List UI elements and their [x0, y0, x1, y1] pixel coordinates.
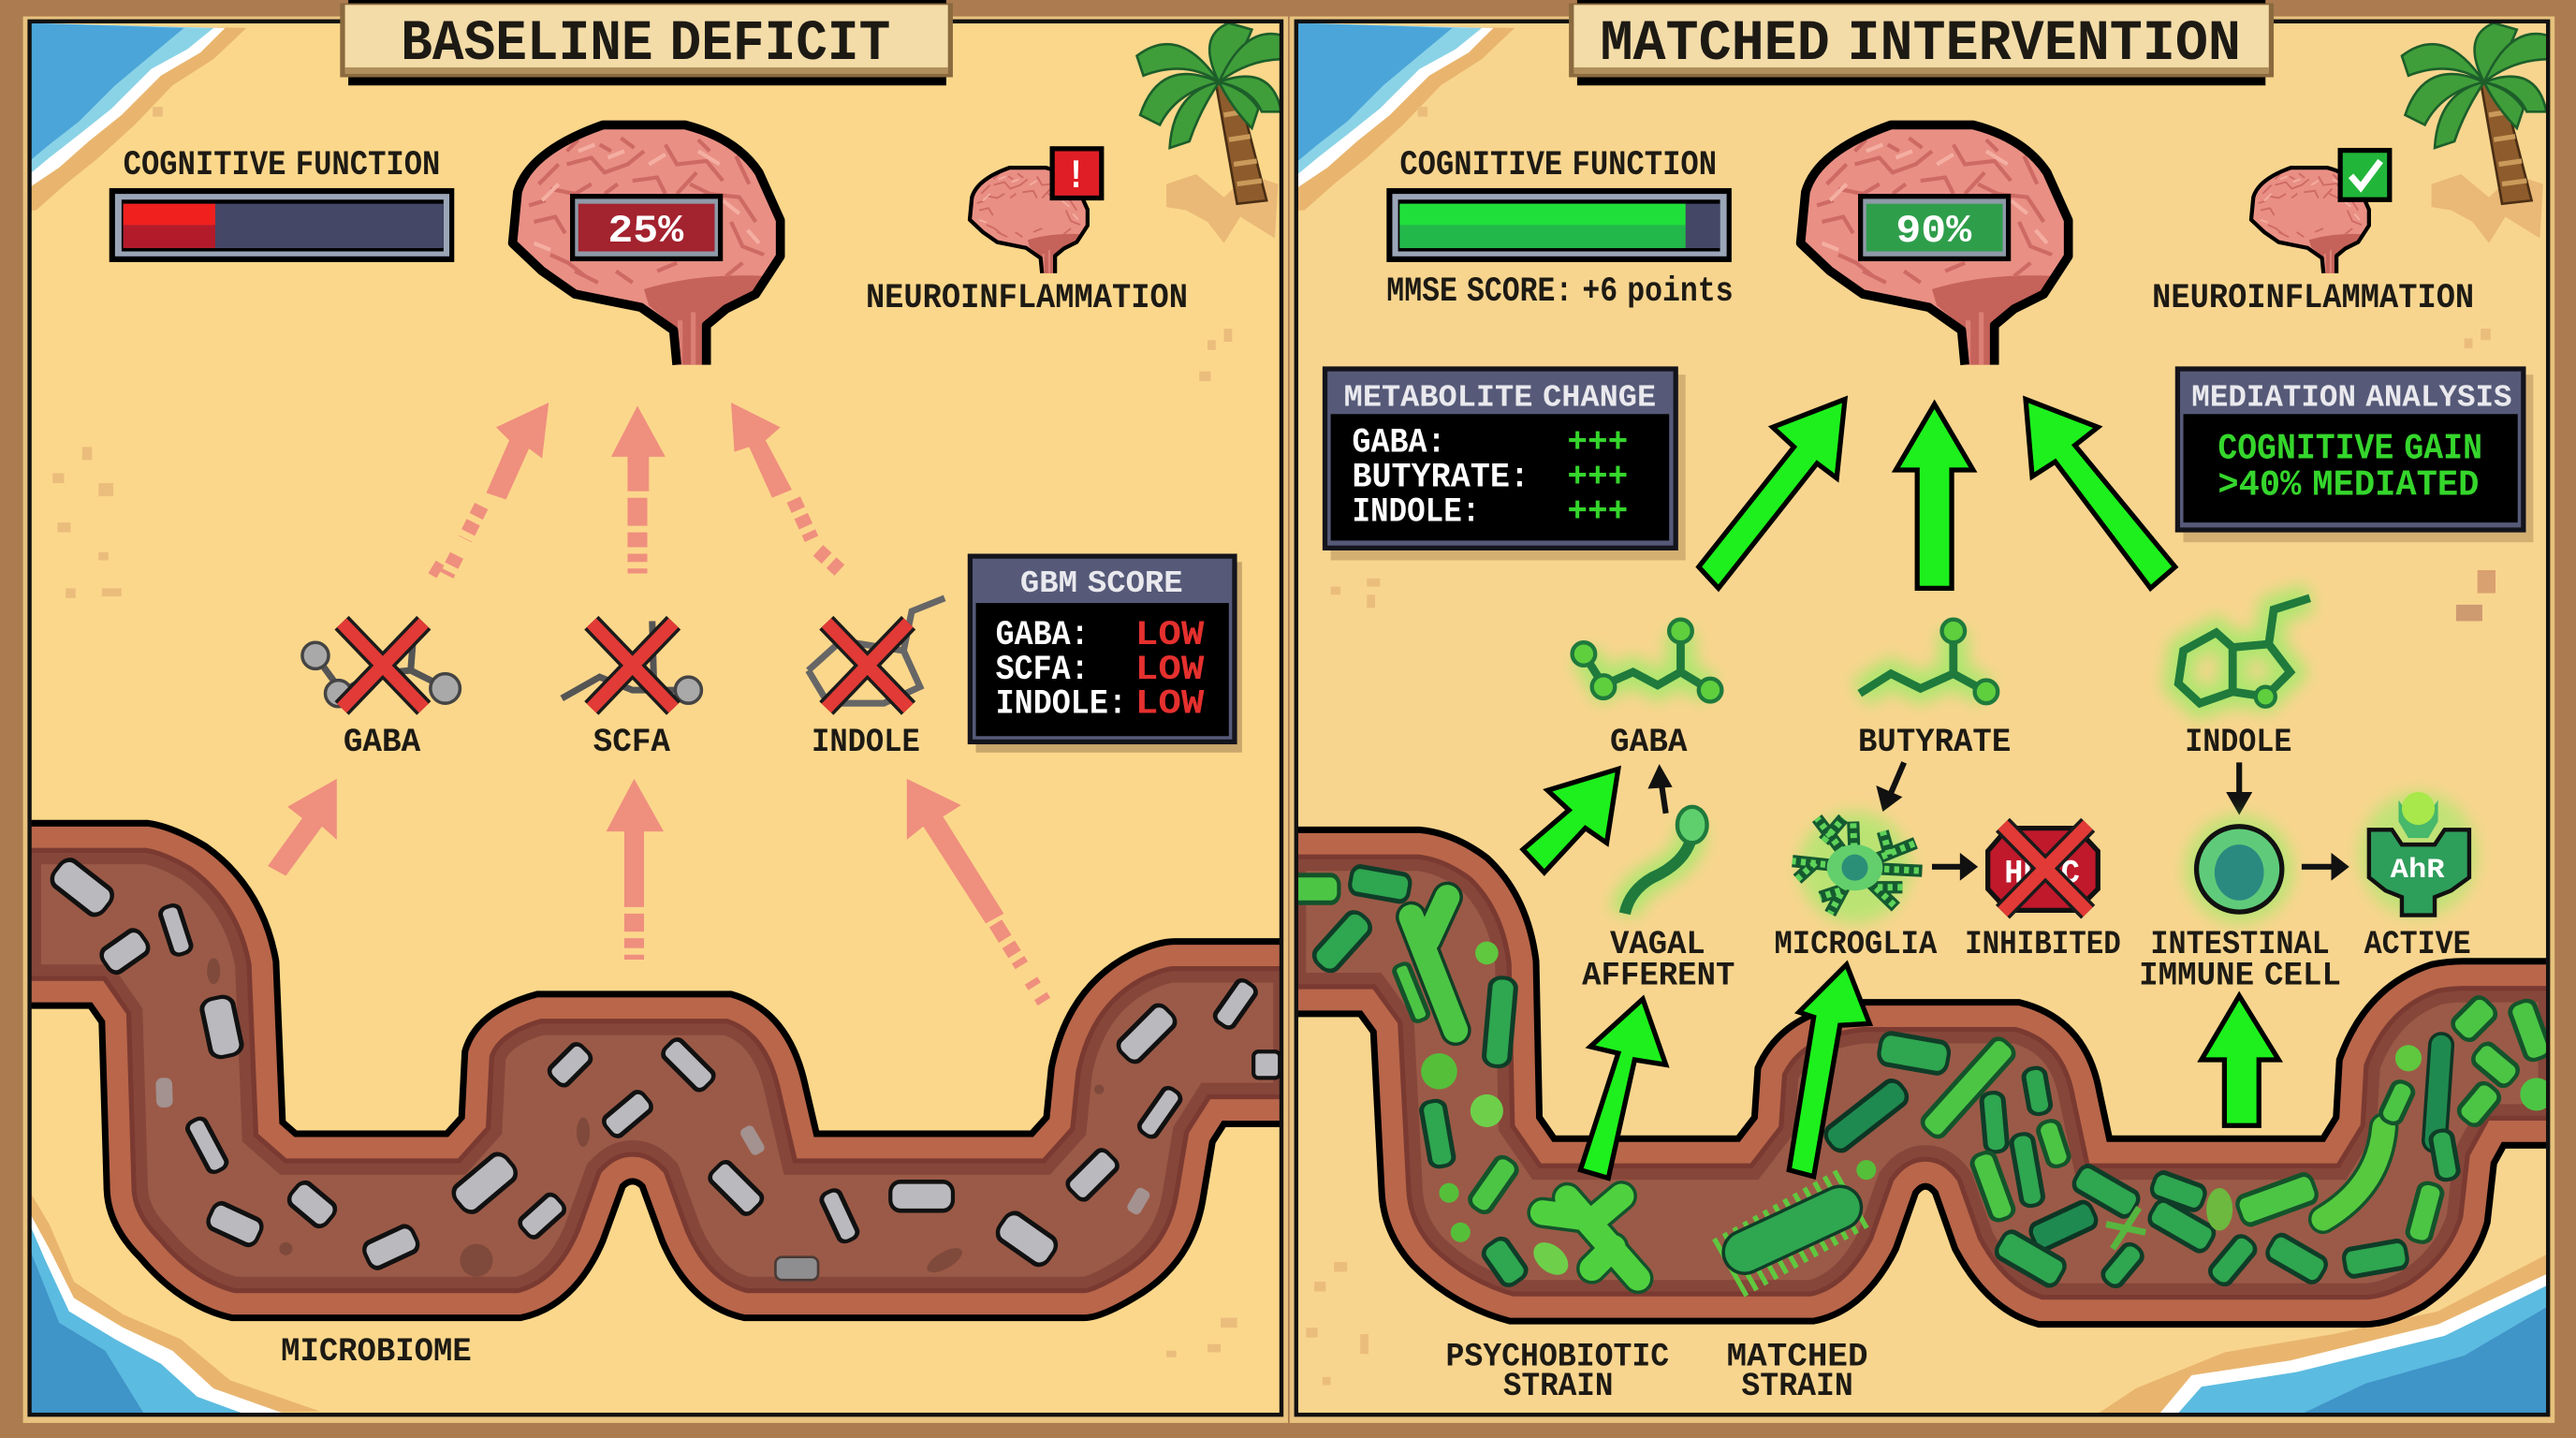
beach water bottom-left — [30, 1191, 320, 1415]
panel: mediation analysis: MEDIATION ANALYSIS — [2191, 381, 2512, 417]
beach water top-left — [1298, 23, 1515, 211]
HDAC inhibited — [1988, 825, 2098, 912]
labels: cell targets: ACTIVE — [2364, 926, 2471, 963]
label: psychobiotic strain — [1445, 1338, 1669, 1405]
neuroinflammation small brain with check — [2251, 148, 2392, 273]
AhR receptor active: AhR — [2391, 854, 2445, 886]
neuroinflammation small brain with alert — [970, 146, 1104, 273]
labels: metabolites: INDOLE — [2185, 724, 2291, 761]
arrows: fading microbiome to metabolites — [268, 779, 1046, 1005]
labels: metabolites: BUTYRATE — [1858, 724, 2011, 761]
panel: metabolite change: GABA: — [1352, 424, 1445, 463]
panel border — [30, 22, 1281, 1415]
panel: mediation analysis — [2175, 366, 2533, 542]
labels: deficient metabolites — [344, 724, 920, 761]
label: neuroinflammation: NEUROINFLAMMATION — [2152, 279, 2474, 318]
molecule: indole glowing — [2178, 598, 2310, 707]
microglia cell — [1793, 812, 1922, 923]
labels: cell targets — [1775, 926, 2471, 994]
label: neuroinflammation: NEUROINFLAMMATION — [866, 279, 1188, 318]
panel: GBM score: LOW — [1135, 685, 1205, 725]
label: psychobiotic strain: STRAIN — [1503, 1368, 1614, 1405]
vagal afferent nerve — [1625, 807, 1707, 914]
panel: GBM score: INDOLE: — [996, 685, 1127, 725]
molecule: butyrate glowing — [1860, 620, 1998, 703]
panel: matched intervention — [1265, 0, 2576, 1423]
arrows: fading metabolite to brain — [432, 403, 840, 579]
label: cognitive function: COGNITIVE FUNCTION — [1399, 146, 1717, 185]
palm tree — [2402, 23, 2550, 243]
brain score 25%: 25% — [607, 209, 684, 254]
labels: deficient metabolites: INDOLE — [812, 724, 920, 761]
label: psychobiotic strain: PSYCHOBIOTIC — [1445, 1338, 1669, 1375]
green bacteria — [1290, 865, 2553, 1290]
panel: metabolite change: +++ — [1567, 492, 1628, 532]
title plaque: baseline deficit — [340, 0, 953, 85]
panel: baseline deficit — [0, 0, 1314, 1423]
panel: GBM score: GABA: — [996, 616, 1090, 655]
palm tree — [1137, 23, 1284, 243]
labels: cell targets: IMMUNE CELL — [2139, 957, 2341, 994]
panel: metabolite change: +++ — [1567, 459, 1628, 498]
brain score 90%: 90% — [1895, 209, 1972, 254]
panel: metabolite change — [1323, 366, 1686, 560]
labels: deficient metabolites: GABA — [344, 724, 421, 761]
label: cognitive function: COGNITIVE FUNCTION — [124, 146, 440, 185]
neuroinflammation small brain with alert: ! — [1066, 154, 1086, 200]
labels: deficient metabolites: SCFA — [593, 724, 671, 761]
labels: cell targets: INHIBITED — [1965, 926, 2121, 963]
brain score 25% — [570, 194, 723, 261]
panel: metabolite change: +++ — [1567, 424, 1628, 463]
sand specks — [1306, 107, 2496, 1386]
labels: vagal afferent — [1582, 926, 1734, 994]
main brain — [1801, 125, 2069, 365]
arrow: vagal to GABA — [1647, 764, 1673, 814]
beach water bottom-right — [2097, 1254, 2548, 1415]
label: matched strain — [1727, 1338, 1868, 1405]
labels: cell targets: INTESTINAL — [2150, 926, 2330, 963]
panel: mediation analysis: >40% MEDIATED — [2217, 464, 2479, 506]
label: MMSE score: MMSE SCORE: +6 points — [1386, 272, 1734, 312]
brain score 90% — [1858, 194, 2011, 261]
label: matched strain: MATCHED — [1727, 1338, 1868, 1375]
gut: depleted microbiome — [0, 823, 1314, 1318]
panel: metabolite change: INDOLE: — [1352, 492, 1480, 532]
gut: restored microbiome — [1265, 829, 2576, 1325]
arrow: indole to immune cell — [2226, 762, 2252, 815]
labels: vagal afferent: AFFERENT — [1582, 957, 1734, 994]
label: matched strain: STRAIN — [1741, 1368, 1853, 1405]
molecule: GABA glowing — [1573, 620, 1721, 701]
label: microbiome: MICROBIOME — [281, 1333, 472, 1371]
main brain — [513, 125, 781, 365]
labels: cell targets: MICROGLIA — [1775, 926, 1938, 963]
panel: GBM score: SCFA: — [996, 651, 1090, 690]
psychobiotic strain — [1528, 1196, 1638, 1282]
title plaque: matched intervention: MATCHED INTERVENTION — [1600, 12, 2241, 77]
title plaque: baseline deficit: BASELINE DEFICIT — [401, 12, 890, 77]
labels: vagal afferent: VAGAL — [1610, 926, 1705, 963]
arrow: immune cell to AhR — [2302, 853, 2349, 881]
matched strain — [1728, 1160, 1876, 1269]
cognitive function bar 25% — [110, 188, 454, 262]
arrows: gut to targets — [1523, 769, 2278, 1178]
arrows: metabolites to brain — [1699, 399, 2175, 588]
beach water top-left — [30, 23, 246, 211]
arrow: microglia to HDAC — [1932, 853, 1978, 881]
panel: GBM score: GBM SCORE — [1020, 566, 1183, 602]
HDAC inhibited: HDAC — [2004, 855, 2080, 892]
molecule SCFA with red cross — [562, 621, 701, 708]
AhR receptor active — [2359, 792, 2478, 917]
intestinal immune cell — [2185, 815, 2293, 923]
panel border — [1296, 22, 2548, 1415]
cognitive function bar 90% — [1386, 188, 1732, 262]
sand specks — [52, 107, 1237, 1357]
panel: metabolite change: BUTYRATE: — [1352, 459, 1530, 498]
molecule indole with red cross — [809, 598, 944, 708]
molecule GABA with red cross — [302, 623, 460, 708]
labels: metabolites: GABA — [1610, 724, 1688, 761]
panel: GBM score: LOW — [1135, 616, 1205, 655]
arrow: butyrate to microglia — [1876, 762, 1904, 812]
panel: GBM score — [968, 553, 1242, 753]
depleted grey bacteria — [48, 856, 1280, 1280]
panel: mediation analysis: COGNITIVE GAIN — [2217, 429, 2482, 470]
panel: metabolite change: METABOLITE CHANGE — [1344, 381, 1656, 417]
labels: metabolites — [1610, 724, 2291, 761]
panel: GBM score: LOW — [1135, 651, 1205, 690]
